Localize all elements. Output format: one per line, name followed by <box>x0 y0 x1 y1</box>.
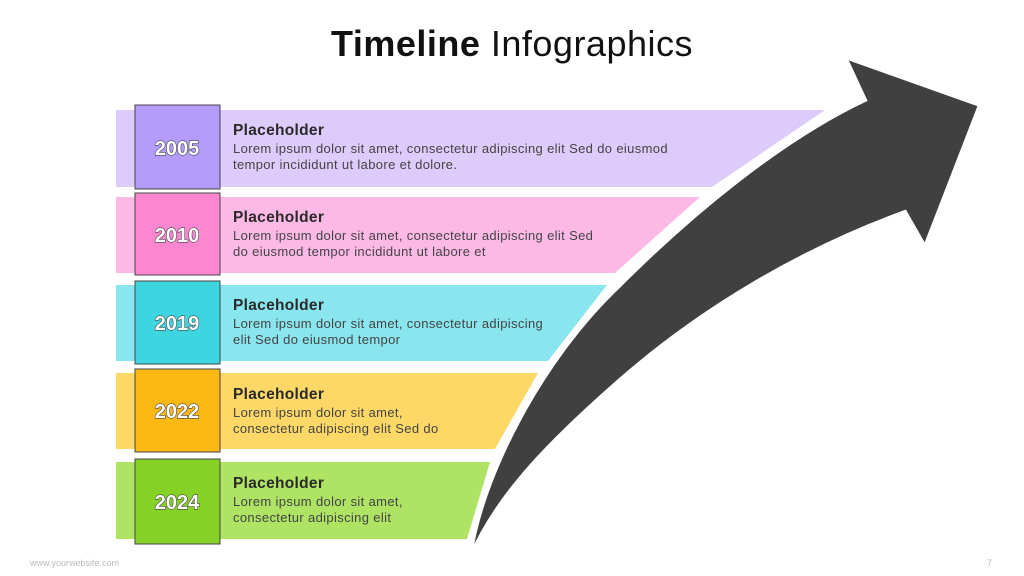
band 2022: 2022 <box>155 401 199 423</box>
text 2005 <box>233 122 668 172</box>
text 2010: Lorem ipsum dolor sit amet, consectetur adipiscing elit Sed <box>233 228 593 243</box>
band 2005 <box>116 105 825 189</box>
band 2024 <box>116 459 490 544</box>
page number: 7 <box>987 558 992 568</box>
text 2022 <box>233 386 439 436</box>
text 2005: Lorem ipsum dolor sit amet, consectetur adipiscing elit Sed do eiusmod <box>233 141 668 156</box>
text 2024: consectetur adipiscing elit <box>233 510 391 524</box>
footer website: www.yourwebsite.com <box>30 558 119 568</box>
text 2019: Lorem ipsum dolor sit amet, consectetur adipiscing <box>233 316 543 331</box>
band 2005: 2005 <box>155 138 199 160</box>
text 2022: Lorem ipsum dolor sit amet, <box>233 405 403 420</box>
text 2024: Lorem ipsum dolor sit amet, <box>233 494 403 509</box>
text 2010: Placeholder <box>233 209 324 226</box>
band 2022 <box>116 369 538 452</box>
text 2019 <box>233 297 543 346</box>
text 2010 <box>233 209 593 258</box>
text 2005: tempor incididunt ut labore et dolore. <box>233 156 457 172</box>
text 2022: consectetur adipiscing elit Sed do <box>233 420 439 436</box>
arrow <box>470 57 980 558</box>
text 2019: Placeholder <box>233 297 324 314</box>
band 2019: 2019 <box>155 313 199 335</box>
text 2024 <box>233 475 403 524</box>
title: Timeline Infographics <box>331 23 693 64</box>
text 2024: Placeholder <box>233 475 324 492</box>
text 2010: do eiusmod tempor incididunt ut labore et <box>233 244 486 258</box>
text 2019: elit Sed do eiusmod tempor <box>233 332 400 346</box>
band 2010 <box>116 193 700 275</box>
band 2024: 2024 <box>155 492 200 514</box>
text 2005: Placeholder <box>233 122 324 139</box>
band 2010: 2010 <box>155 225 199 247</box>
text 2022: Placeholder <box>233 386 324 403</box>
band 2019 <box>116 281 607 364</box>
